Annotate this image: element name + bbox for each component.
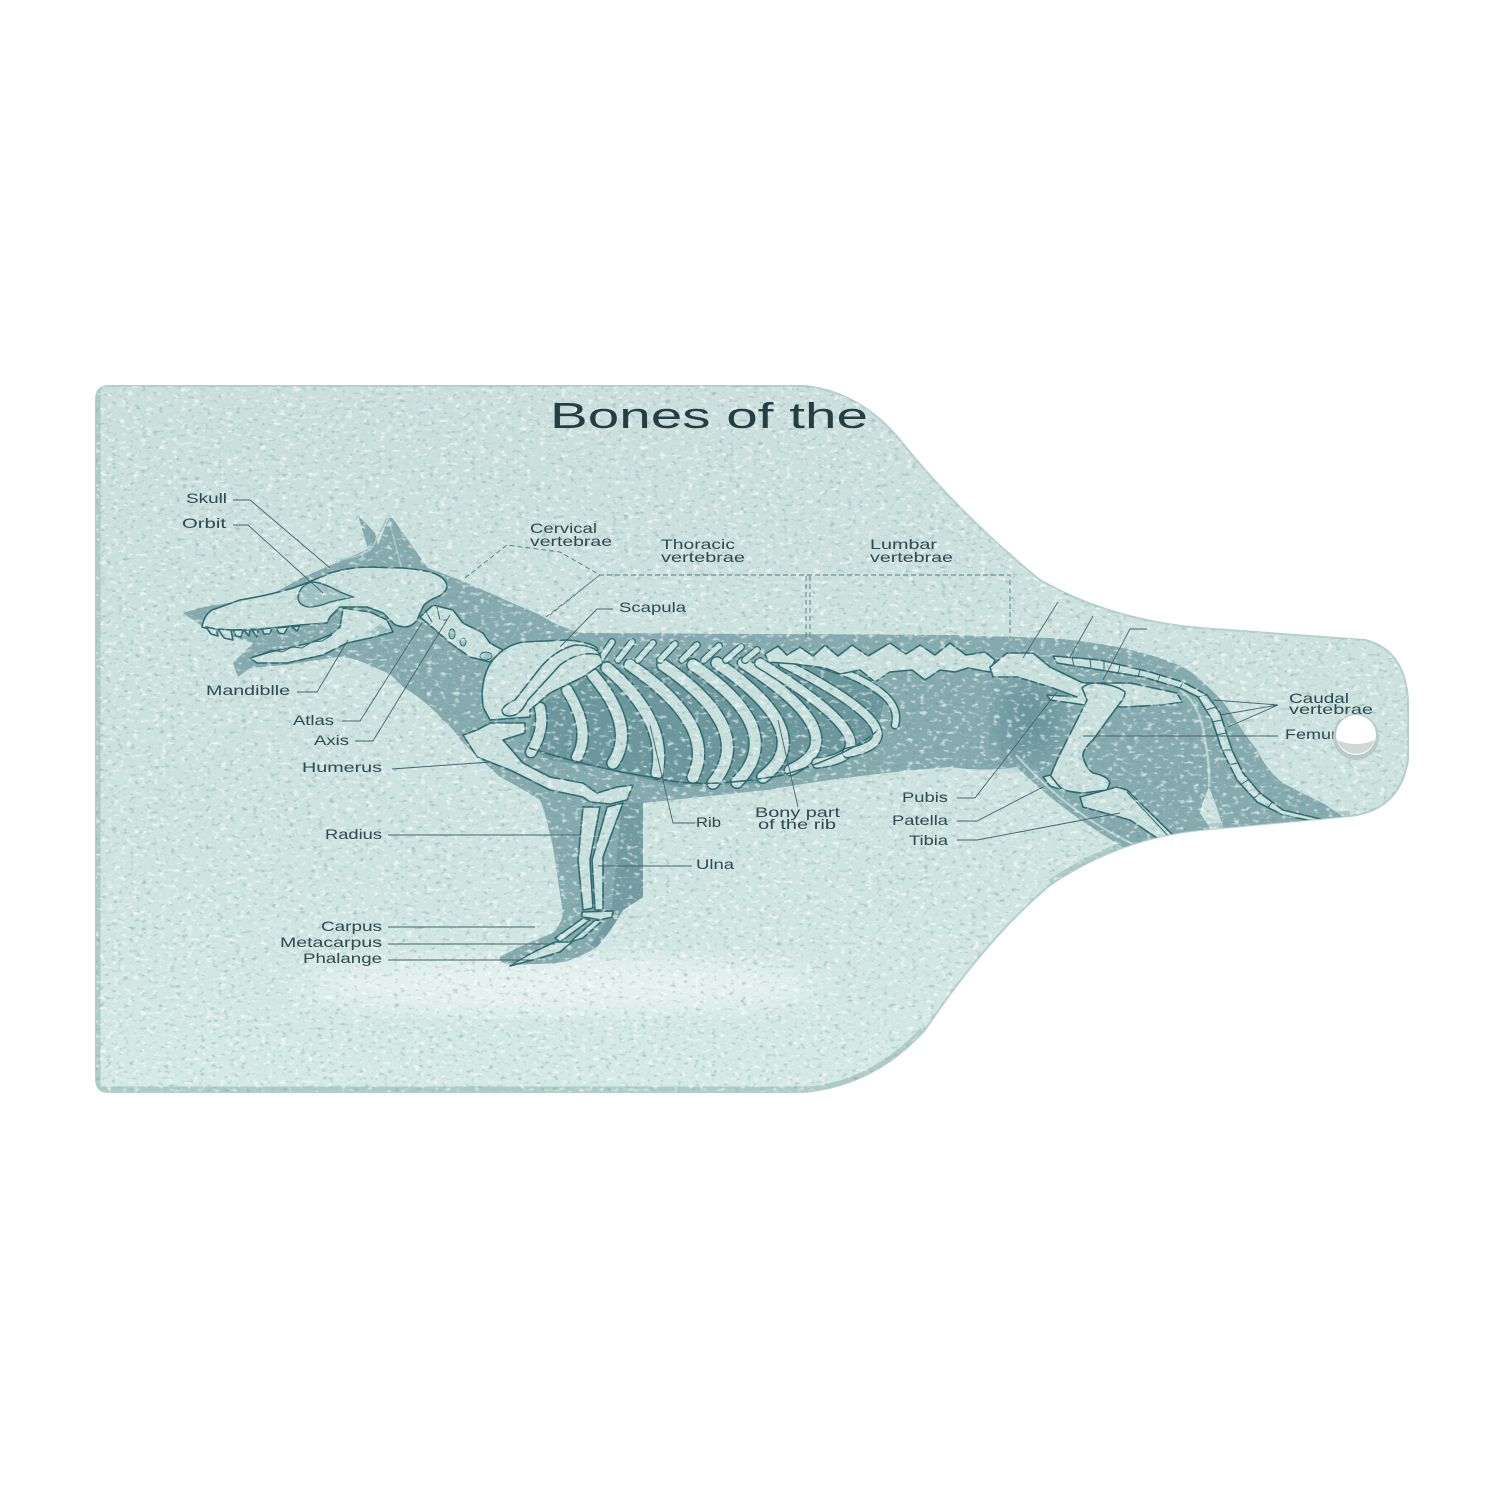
cervical vertebrae xyxy=(420,605,503,662)
sternum line xyxy=(529,730,878,783)
labels: Femur xyxy=(1285,726,1337,742)
labels: of the rib xyxy=(758,816,836,832)
pelvis xyxy=(990,653,1182,707)
tail light line xyxy=(1180,690,1209,787)
surface texture: dark flecks xyxy=(90,380,1415,1100)
labels: Metacarpus xyxy=(280,934,382,950)
lumbar vertebrae xyxy=(765,643,995,682)
shading: haunch xyxy=(996,680,1064,764)
cutting board infographic xyxy=(95,385,1409,1093)
labels: Caudal xyxy=(1289,690,1349,706)
labels: Ulna xyxy=(696,856,734,872)
labels: Rib xyxy=(696,814,721,830)
thoracic spinous processes xyxy=(600,642,757,660)
skull xyxy=(202,567,447,640)
surface texture: white flecks xyxy=(90,380,1415,1100)
patella xyxy=(1043,775,1062,790)
humerus xyxy=(463,723,633,804)
labels: Humerus xyxy=(302,759,382,775)
board: glass outline xyxy=(96,386,1408,1092)
orbit xyxy=(298,582,353,607)
labels: Radius xyxy=(325,826,382,842)
dog silhouette xyxy=(183,515,1352,965)
tibia and fibula xyxy=(1079,786,1173,838)
labels: vertebrae xyxy=(870,549,953,565)
labels: Axis xyxy=(314,732,349,748)
hanging hole xyxy=(1333,714,1379,760)
ear crease xyxy=(340,516,402,570)
labels: Skull xyxy=(186,490,227,506)
vertebrae dashed brackets xyxy=(465,545,1010,638)
labels: vertebrae xyxy=(1289,701,1373,717)
skeleton xyxy=(202,567,1333,966)
labels: Phalange xyxy=(303,950,382,966)
phalanges xyxy=(510,942,572,966)
leader lines xyxy=(233,500,1278,960)
labels: Mandiblle xyxy=(206,682,290,698)
radius xyxy=(578,807,600,910)
labels: Scapula xyxy=(619,599,686,615)
mandible xyxy=(250,608,393,663)
labels: Thoracic xyxy=(661,536,735,552)
teeth xyxy=(206,626,300,640)
labels: Orbit xyxy=(182,515,226,531)
labels: Tibia xyxy=(909,832,948,848)
labels: Pubis xyxy=(902,789,948,805)
ribs xyxy=(531,663,896,783)
ulna xyxy=(592,803,623,910)
femur xyxy=(1050,683,1125,793)
labels: Patella xyxy=(892,812,948,828)
title: Bones of the xyxy=(550,395,868,436)
shading: foreleg shadow xyxy=(590,803,643,947)
labels: Lumbar xyxy=(870,536,937,552)
labels: vertebrae xyxy=(661,549,745,565)
labels: vertebrae xyxy=(530,533,612,549)
light sheen xyxy=(300,957,820,1013)
labels: Cervical xyxy=(530,520,597,536)
labels: Bony part xyxy=(755,804,840,820)
scapula xyxy=(482,640,603,720)
carpus and metacarpus xyxy=(555,911,613,942)
board surface contents xyxy=(90,380,1415,1100)
labels: Carpus xyxy=(321,918,382,934)
board edge bands xyxy=(96,390,1350,1090)
rib cage interior xyxy=(527,664,885,787)
hind leg light line xyxy=(1016,755,1135,845)
labels xyxy=(182,490,1373,966)
caudal vertebrae xyxy=(1053,656,1333,822)
labels: Atlas xyxy=(293,712,334,728)
